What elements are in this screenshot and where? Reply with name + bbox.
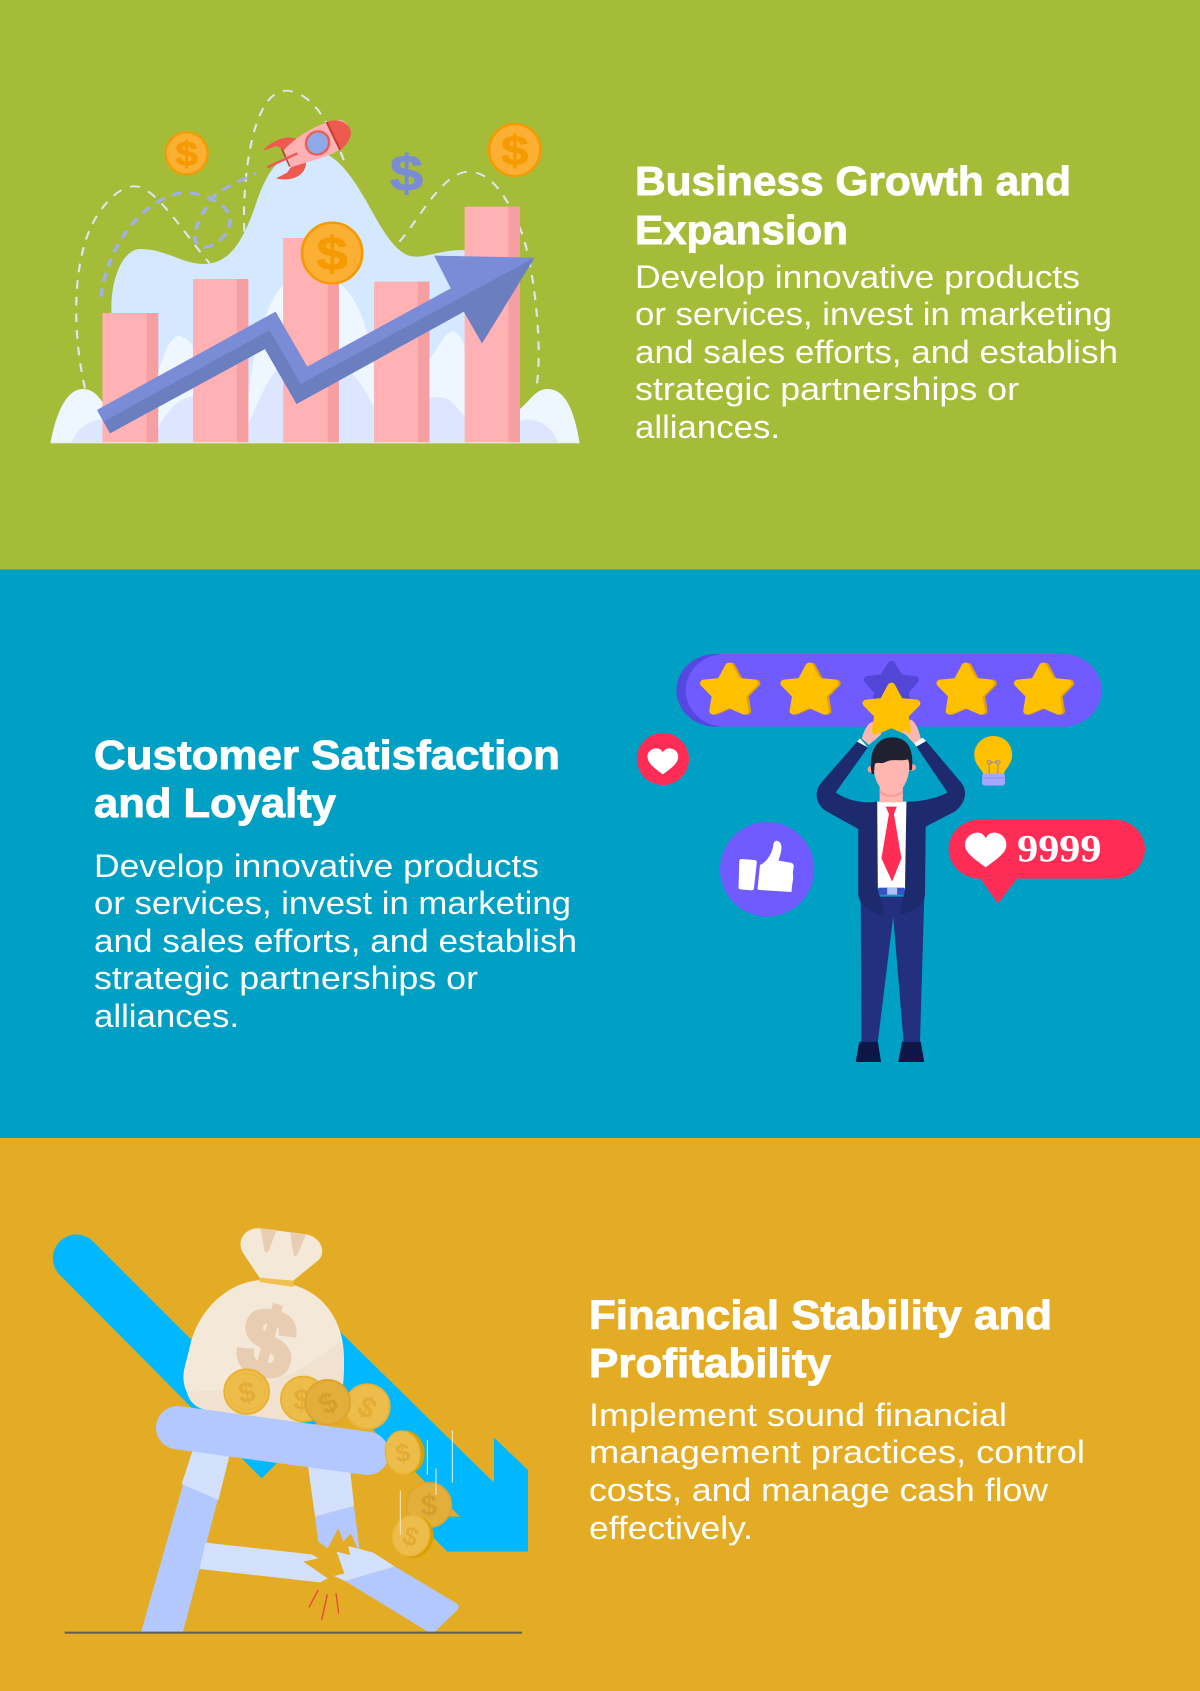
heading: Profitability	[589, 1340, 831, 1386]
body text: costs, and manage cash flow	[589, 1472, 1049, 1508]
rocket	[263, 120, 351, 179]
body text: effectively.	[589, 1510, 753, 1546]
thumbs up badge	[720, 822, 814, 917]
body text: or services, invest in marketing	[635, 296, 1112, 332]
ground line	[65, 1632, 522, 1634]
rising arrow	[97, 256, 535, 433]
heading	[635, 158, 1071, 253]
panel: financial stability	[0, 1138, 1200, 1691]
star rating row	[704, 665, 1070, 711]
coins on seat: $	[294, 1384, 310, 1417]
mountain backdrop	[51, 150, 580, 443]
body text: Develop innovative products	[94, 848, 539, 884]
body text: Develop innovative products	[635, 259, 1080, 295]
falling coins: $	[393, 1437, 412, 1469]
rating pill	[676, 654, 1102, 727]
dashed flight paths	[76, 91, 539, 388]
coins on seat: $	[351, 1389, 382, 1426]
body text: strategic partnerships or	[94, 960, 478, 996]
body text: management practices, control	[589, 1434, 1085, 1470]
crack marks	[309, 1590, 339, 1620]
bar chart	[102, 207, 520, 443]
hands	[862, 719, 921, 745]
money bag	[183, 1228, 344, 1423]
heart badge	[637, 733, 689, 785]
body text	[635, 259, 1118, 445]
heading: Financial Stability and	[589, 1292, 1052, 1338]
coins on seat: $	[236, 1375, 258, 1410]
illustration: man with star rating	[637, 654, 1145, 1062]
body text: alliances.	[635, 409, 780, 445]
falling coins: $	[399, 1520, 423, 1553]
heading: and Loyalty	[94, 780, 336, 826]
coin left: $	[175, 134, 198, 173]
body text	[94, 848, 577, 1034]
coins on seat	[224, 1369, 390, 1429]
stool seat	[178, 1428, 367, 1453]
motion lines	[400, 1430, 452, 1535]
body text: or services, invest in marketing	[94, 885, 571, 921]
heading: Expansion	[635, 207, 848, 253]
illustration: money bag on broken stool	[53, 1228, 528, 1634]
fingers	[872, 731, 913, 741]
heading	[589, 1292, 1052, 1386]
businessman	[817, 737, 965, 1062]
coin left	[166, 132, 208, 174]
body text: Implement sound financial	[589, 1397, 1007, 1433]
falling coins: $	[421, 1490, 437, 1523]
coin right	[489, 124, 541, 176]
ground line	[51, 441, 580, 444]
money bag: $	[228, 1286, 306, 1402]
panel: customer satisfaction	[0, 570, 1200, 1138]
illustration: growth chart with rocket	[51, 91, 580, 443]
coin right: $	[501, 128, 528, 174]
stool legs	[142, 1448, 459, 1633]
coins on seat: $	[313, 1385, 344, 1422]
coin large: $	[317, 228, 348, 281]
body text	[589, 1397, 1085, 1546]
dollar sign: $	[390, 145, 423, 202]
heading	[94, 732, 560, 826]
like counter bubble	[949, 819, 1145, 903]
falling coins	[382, 1428, 451, 1564]
coin large	[302, 223, 362, 283]
body text: and sales efforts, and establish	[94, 923, 577, 959]
like counter bubble: 9999	[1017, 827, 1101, 870]
body text: strategic partnerships or	[635, 371, 1019, 407]
body text: and sales efforts, and establish	[635, 334, 1118, 370]
light bulb	[974, 736, 1012, 786]
falling arrow	[53, 1235, 528, 1552]
body text: alliances.	[94, 998, 239, 1034]
panel: business growth	[0, 0, 1200, 570]
star held by man	[866, 686, 916, 731]
heading: Customer Satisfaction	[94, 732, 560, 778]
heading: Business Growth and	[635, 158, 1071, 204]
